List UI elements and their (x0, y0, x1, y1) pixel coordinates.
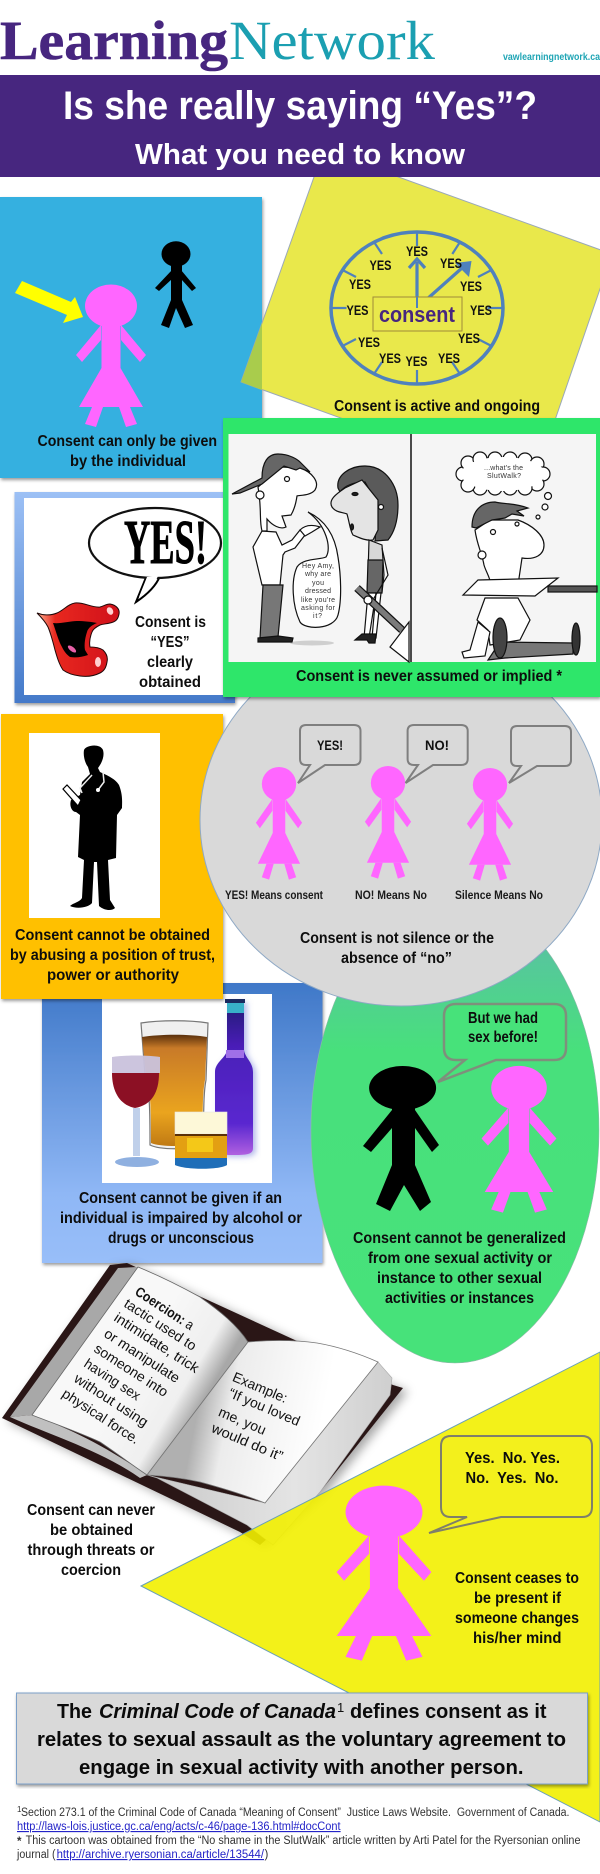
definition box: engage in sexual activity with another person. (79, 1756, 524, 1779)
chart: yes clock: YES (358, 334, 380, 350)
footnotes: http://laws-lois.justice.gc.ca/eng/acts/c-46/page-136.html#docCont (17, 1821, 341, 1833)
logo word Learning: Learning (0, 10, 228, 71)
footnotes: This cartoon was obtained from the “No shame in the SlutWalk” article written by Arti Patel for the Ryersonian online (26, 1835, 581, 1847)
panel: consent is not silence (200, 634, 600, 1006)
logo header (0, 10, 600, 71)
definition box: 1 (337, 1700, 344, 1715)
caption: YES clearly obtained (135, 614, 206, 691)
caption: YES clearly obtained: Consent is (135, 614, 206, 631)
footnotes: journal ( (16, 1849, 56, 1861)
icon: YES speech bubble: YES! (124, 509, 207, 577)
icon: pink woman figure (482, 1066, 556, 1213)
speech bubble: hey Amy: it? (313, 613, 322, 620)
chart: yes clock: YES (370, 257, 392, 273)
text: coercion definition: intimidate, trick (111, 1309, 203, 1376)
text: coercion example (208, 1369, 303, 1464)
icon: red lips (37, 603, 119, 676)
subtitle: What you need to know (135, 139, 465, 171)
cartoon illustration (228, 434, 597, 662)
icon: silent woman (467, 768, 513, 881)
chart: yes clock: consent (379, 302, 456, 327)
callout: yes no yes no: Yes. No. Yes. (465, 1450, 560, 1467)
callout: we had sex before: sex before! (468, 1029, 538, 1046)
left man (232, 454, 334, 646)
figure labels: YES! Means consent (225, 888, 323, 902)
speech bubble: hey Amy: Hey Amy, (302, 563, 334, 570)
caption: never assumed: Consent is never assumed or implied * (296, 668, 563, 685)
panel: never assumed or implied (223, 418, 600, 697)
figure labels: Silence Means No (455, 888, 543, 902)
caption: threats or coercion: coercion (61, 1562, 121, 1579)
footnotes: ) (264, 1849, 268, 1861)
caption: position of trust (10, 927, 215, 984)
footnotes: * (17, 1836, 22, 1848)
text: coercion example: would do it” (208, 1419, 286, 1464)
caption: generalized: instance to other sexual (377, 1270, 542, 1287)
callout: we had sex before (438, 1004, 566, 1082)
icon: black man figure (363, 1066, 439, 1211)
thought cloud: SlutWalk? (487, 473, 521, 480)
caption: impaired (60, 1190, 302, 1247)
title banner (0, 75, 600, 177)
callout: we had sex before: But we had (468, 1010, 538, 1027)
caption: individual: Consent can only be given (38, 433, 217, 450)
panel: consent only by the individual (0, 197, 262, 478)
figure labels (225, 888, 543, 902)
text: coercion definition: having sex (81, 1355, 144, 1403)
caption: impaired: Consent cannot be given if an (79, 1190, 282, 1207)
thought cloud: ...what's the (484, 465, 523, 472)
icon: doctor silhouette (63, 745, 122, 910)
caption: threats or coercion: through threats or (28, 1542, 154, 1559)
icon: pink woman figure (337, 1486, 431, 1661)
text: coercion definition (59, 1283, 203, 1447)
woman with bat (331, 466, 409, 662)
chart: yes clock: YES (458, 330, 480, 346)
footnotes: http://archive.ryersonian.ca/article/13544/ (57, 1849, 265, 1861)
caption: generalized: from one sexual activity or (368, 1250, 552, 1267)
callout: YES (298, 725, 360, 783)
panel: threats or coercion book (2, 1263, 403, 1579)
caption: not silence: absence of “no” (341, 950, 452, 967)
text: coercion example: me, you (216, 1404, 269, 1438)
callout: empty silence (509, 726, 571, 783)
chart: yes clock (331, 232, 503, 384)
speech bubble: hey Amy: dressed (305, 588, 331, 595)
chart: yes clock: YES (349, 276, 371, 292)
chart: yes clock: YES (438, 350, 460, 366)
chart: yes clock: YES (460, 278, 482, 294)
caption: position of trust: Consent cannot be obtained (15, 927, 210, 944)
caption: position of trust: power or authority (47, 967, 179, 984)
caption: individual (38, 433, 217, 470)
caption: threats or coercion: be obtained (50, 1522, 133, 1539)
caption: YES clearly obtained: obtained (139, 674, 201, 691)
icon: alcoholic drinks (112, 999, 253, 1169)
callout: NO: NO! (425, 737, 449, 753)
chart: yes clock: YES (440, 255, 462, 271)
speech bubble: hey Amy: asking for (301, 605, 336, 612)
chart: yes clock: YES (470, 302, 492, 318)
thought cloud (456, 452, 552, 519)
caption: threats or coercion: Consent can never (27, 1502, 155, 1519)
caption: generalized: Consent cannot be generalized (353, 1230, 566, 1247)
speech bubble: hey Amy: like you're (301, 597, 335, 604)
panel: YES clearly obtained (14, 492, 235, 703)
footnotes (16, 1805, 581, 1861)
chart: yes clock: YES (406, 353, 428, 369)
caption: ceases: his/her mind (473, 1630, 562, 1647)
panel: impaired by alcohol or drugs (42, 983, 322, 1263)
panel: position of trust (1, 714, 223, 999)
icon: woman saying no (365, 766, 411, 879)
panel: cannot be generalized (311, 897, 599, 1363)
caption: threats or coercion (27, 1502, 155, 1579)
caption: ceases (455, 1570, 579, 1647)
caption: YES clearly obtained: clearly (147, 654, 193, 671)
icon: YES speech bubble (89, 508, 221, 602)
caption: generalized (353, 1230, 566, 1307)
caption: ceases: Consent ceases to (455, 1570, 579, 1587)
chart: yes clock: YES (406, 243, 428, 259)
caption: impaired: individual is impaired by alcohol or (60, 1210, 302, 1227)
definition box: Criminal Code of Canada (99, 1700, 336, 1723)
callout: NO (406, 725, 468, 783)
caption: impaired: drugs or unconscious (108, 1230, 254, 1247)
callout: YES: YES! (317, 737, 343, 753)
definition box: relates to sexual assault as the voluntary agreement to (37, 1728, 566, 1751)
chart: yes clock: YES (346, 302, 368, 318)
text: coercion definition: Coercion: a (132, 1283, 197, 1333)
panel: consent is active and ongoing (241, 150, 600, 487)
caption: not silence (300, 930, 494, 967)
text: coercion definition: tactic used to (121, 1295, 200, 1354)
chart: yes clock: YES (379, 350, 401, 366)
text: coercion definition: or manipulate (101, 1325, 183, 1386)
figure labels: NO! Means No (355, 888, 427, 902)
icon: black man figure (155, 241, 196, 328)
main title: Is she really saying “Yes”? (63, 84, 537, 128)
caption: YES clearly obtained: “YES” (150, 634, 190, 651)
definition box: The (57, 1700, 92, 1723)
caption: not silence: Consent is not silence or the (300, 930, 494, 947)
icon: pink woman figure (76, 284, 146, 427)
caption: individual: by the individual (70, 453, 186, 470)
caption: ceases: be present if (474, 1590, 562, 1607)
definition box: defines consent as it (350, 1700, 547, 1723)
callout: yes no yes no: No. Yes. No. (466, 1470, 558, 1487)
speech bubble: hey Amy: why are (304, 571, 331, 578)
definition box (16, 1693, 588, 1784)
speech bubble: hey Amy: you (312, 580, 324, 587)
text: coercion definition: physical force. (59, 1385, 143, 1447)
caption: position of trust: by abusing a position of trust, (10, 947, 215, 964)
footnotes: 1 (17, 1805, 22, 1814)
seated man with head through table (462, 502, 597, 660)
caption: ceases: someone changes (455, 1610, 579, 1627)
illustration: open book (2, 1263, 403, 1545)
text: coercion example: “If you loved (226, 1385, 303, 1429)
panel: consent ceases (141, 1352, 600, 1822)
logo word Network: Network (229, 10, 436, 71)
text: coercion definition: someone into (91, 1340, 172, 1400)
caption: generalized: activities or instances (385, 1290, 534, 1307)
icon: woman saying yes (256, 767, 302, 880)
text: coercion example: Example: (230, 1369, 290, 1406)
callout: yes no yes no (429, 1436, 592, 1533)
text: coercion definition: without using (70, 1370, 151, 1430)
speech bubble: hey Amy (293, 512, 341, 627)
icon: yellow arrow (15, 281, 83, 323)
caption: active and ongoing: Consent is active and ongoing (334, 398, 540, 415)
